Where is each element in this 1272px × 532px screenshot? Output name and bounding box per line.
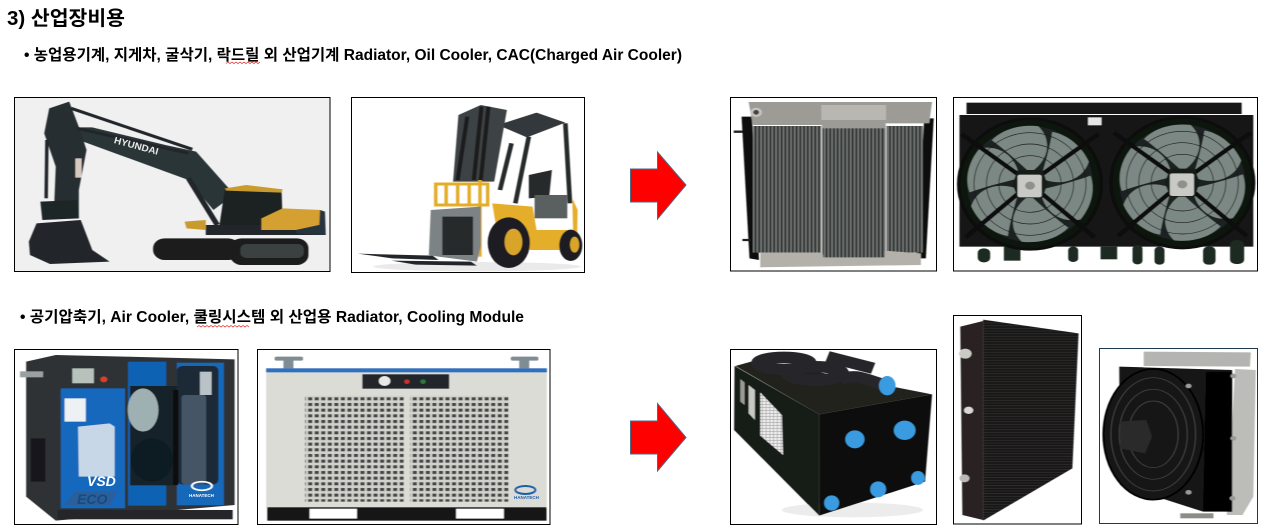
unit top: [735, 360, 932, 414]
excavator tracks: [153, 238, 308, 265]
compressor labels: VSD: [87, 473, 116, 489]
forklift seat: [529, 170, 552, 198]
fan unit shroud: [1119, 367, 1232, 512]
core side manifold: [960, 321, 983, 520]
radiator bottom tanks: [760, 251, 921, 267]
air cooler gauge panel: [362, 374, 449, 389]
compressor blue panels: [61, 388, 125, 508]
radiator top tanks: [749, 102, 932, 128]
text block: compressors and cooling systems: • 공기압축기, Air Cooler, 쿨링시스템 외 산업용 Radiator, Cooling Module: [20, 308, 524, 326]
forklift mast: [453, 105, 507, 182]
panel: oil cooler core: [959, 320, 1079, 521]
compressor inverter: [78, 423, 115, 477]
title: 3) 산업장비용: [7, 7, 125, 30]
panel: air compressor: [20, 355, 235, 521]
fan unit motor: [1120, 420, 1152, 453]
panel: excavator: [14, 98, 330, 272]
forklift wheels: [488, 217, 530, 268]
panel: fan cooler unit: [1103, 352, 1256, 518]
air cooler flanges: [275, 357, 538, 369]
excavator boom: [73, 127, 229, 210]
left fan: [956, 119, 1104, 249]
unit blue caps: [824, 376, 925, 511]
fan unit bolts: [1186, 374, 1236, 501]
core ports: [959, 349, 973, 482]
fan module frame: [967, 103, 1242, 114]
unit pipes: [758, 357, 886, 385]
panel: radiator: [734, 102, 934, 267]
compressor interior: [130, 386, 177, 485]
radiator core: [753, 126, 923, 253]
air cooler logo text: HANATECH: [514, 495, 539, 500]
panel: air cooler: [266, 357, 547, 521]
unit shadow: [782, 503, 923, 517]
fan module pipes: [978, 240, 1244, 265]
excavator bucket: [29, 220, 110, 264]
forklift roof and posts: [498, 113, 565, 137]
excavator cab: [219, 188, 283, 227]
unit front face: [819, 394, 932, 516]
compressor control panel: [72, 368, 94, 383]
arrow: top row: [630, 152, 686, 219]
air cooler logo: [515, 486, 535, 494]
panel: forklift: [358, 105, 582, 271]
excavator brand: HYUNDAI: [113, 135, 160, 158]
right fan: [1108, 117, 1256, 248]
arrow: bottom row: [630, 404, 686, 471]
fan unit guard: [1103, 369, 1203, 500]
radiator side rails: [742, 117, 759, 260]
panel: twin fan cooling module: [956, 103, 1256, 265]
excavator warning stripe: [75, 158, 82, 178]
forklift forks: [358, 254, 438, 260]
text block: agricultural and industrial machinery: • 농업용기계, 지게차, 굴삭기, 락드릴 외 산업기계 Radiator, Oil Cooler, CAC(Charged Air Cooler): [24, 46, 682, 64]
forklift shadow: [373, 262, 581, 271]
compressor cabinet: [26, 355, 235, 521]
forklift carriage: [429, 207, 481, 262]
compressor labels: ECO: [77, 491, 107, 507]
excavator counterweight: [262, 208, 321, 230]
excavator stick: [44, 102, 87, 218]
unit left face: [734, 366, 819, 516]
forklift body: [492, 198, 578, 250]
compressor labels: HANATECH: [189, 493, 214, 498]
air cooler base: [267, 507, 547, 521]
panel: cooling system unit: [734, 357, 932, 517]
panel: box outlines top row: [14, 98, 1258, 272]
air cooler grilles: [305, 396, 404, 502]
air cooler cabinet: [266, 368, 547, 508]
fan unit aluminium tank: [1144, 352, 1251, 367]
core fins: [983, 320, 1079, 521]
forklift guard: [436, 180, 488, 257]
panel: box outlines bottom row: [14, 316, 1258, 524]
compressor labels: [77, 473, 214, 507]
